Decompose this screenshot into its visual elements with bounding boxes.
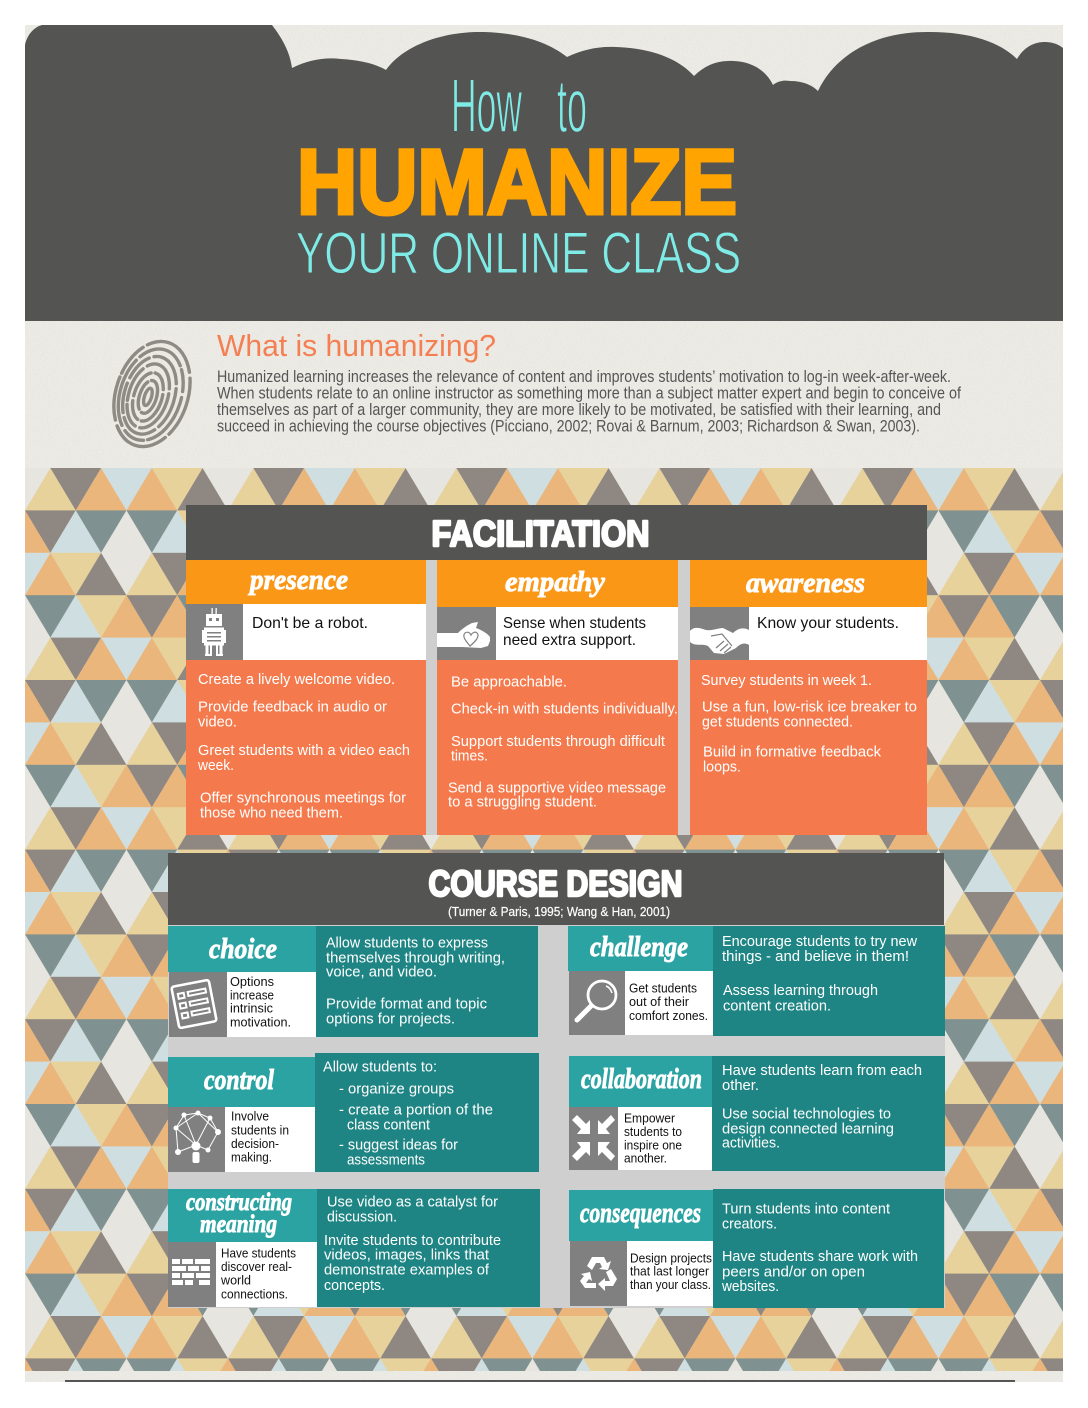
tips: empathy: times. [451,748,488,765]
card: empathy [437,560,678,835]
tips: consequences: creators. [722,1215,777,1232]
icon: arrows pointing inward [572,1115,615,1161]
tagline: collaboration [624,1110,682,1166]
tips: awareness: loops. [703,759,741,776]
tips: empathy: Be approachable. [451,674,567,691]
tips: challenge: content creation. [723,998,831,1015]
tips: presence: Provide feedback in audio or [198,699,387,716]
panel: facilitation [186,505,927,835]
section: what is humanizing [217,328,961,436]
tips: constructing meaning: demonstrate examples of [324,1261,490,1278]
tagline: collaboration: inspire one [624,1137,682,1152]
title line: YOUR ONLINE CLASS: YOUR ONLINE CLASS [296,221,741,286]
tips: choice: themselves through writing, [326,949,505,966]
tips: constructing meaning [324,1194,501,1294]
tagline: challenge: comfort zones. [629,1008,708,1023]
tagline: control: Involve [231,1109,269,1124]
tips: awareness [701,672,917,776]
card title: choice: choice [209,933,277,965]
tagline: constructing meaning: world [220,1272,251,1287]
tagline: control [231,1109,289,1165]
tips: control: class content [347,1116,431,1133]
card title: consequences: consequences [580,1197,701,1229]
tips: collaboration: design connected learning [722,1120,894,1137]
tips: consequences: peers and/or on open [722,1264,865,1281]
icon: robot [202,608,226,656]
icon: brick wall [172,1259,210,1285]
tips: empathy: Support students through difficult [451,733,666,750]
tips: empathy: Send a supportive video message [448,779,666,796]
tips: choice: Allow students to express [326,934,488,951]
tips: control: - suggest ideas for [339,1136,458,1153]
title line: HUMANIZE: HUMANIZE [297,132,737,234]
icon: handshake [690,628,749,654]
card title: constructing meaning: meaning [200,1211,277,1238]
course design header bar [168,853,944,925]
tips: collaboration: other. [722,1077,759,1094]
tips: control: - organize groups [339,1080,454,1097]
tips: control: - create a portion of the [339,1101,493,1118]
tips: constructing meaning: Invite students to contribute [324,1232,501,1249]
tips: constructing meaning: videos, images, links that [324,1246,490,1263]
tips: consequences [721,1200,918,1295]
tips: awareness: Build in formative feedback [703,744,881,761]
card title: constructing meaning: constructing [186,1189,292,1216]
tips: challenge: Encourage students to try new [722,933,917,950]
tips: awareness: Survey students in week 1. [701,672,872,689]
card title: awareness: awareness [746,567,865,599]
paragraph: definition [217,368,961,436]
tagline: constructing meaning: discover real- [221,1259,292,1274]
tagline: constructing meaning: Have students [221,1246,296,1261]
card: control [168,1053,539,1172]
tagline: consequences: than your class. [630,1277,711,1292]
tips: challenge: Assess learning through [723,982,878,999]
facilitation header bar [186,505,927,560]
tips: awareness: get students connected. [702,714,853,731]
card: consequences [569,1189,944,1308]
tips: constructing meaning: concepts. [324,1277,385,1294]
icon: recycle arrows [580,1257,617,1291]
tagline: collaboration: Empower [624,1110,676,1125]
card title: constructing meaning [186,1189,292,1238]
icon: form checklist [171,980,217,1028]
tips: presence [197,671,410,821]
tagline: constructing meaning [220,1246,296,1301]
card title: control: control [204,1064,275,1096]
heading: course design: COURSE DESIGN [428,863,682,904]
icon: magnifying glass [577,981,616,1020]
paragraph: definition: Humanized learning increases the relevance of content and improves students’ motivation to log-in week-after-week. [217,368,951,386]
card: presence [186,560,426,835]
tagline: empathy: need extra support. [503,632,636,649]
tips: constructing meaning: discussion. [327,1209,397,1226]
card: choice [168,926,538,1037]
icon: network around person [174,1110,221,1163]
tips: challenge: things - and believe in them! [722,948,909,965]
card: challenge [568,926,945,1036]
card title: empathy: empathy [505,566,605,598]
title: to [557,64,587,149]
tagline: consequences: that last longer [630,1264,710,1279]
tagline: presence: Don't be a robot. [252,615,368,632]
card: constructing meaning [168,1189,540,1307]
tagline: collaboration: another. [624,1151,667,1166]
panel: course design [168,853,945,1308]
icon: fingerprint [101,332,203,456]
tagline: challenge: out of their [629,994,690,1009]
tips: collaboration: Use social technologies to [722,1105,891,1122]
tagline: awareness: Know your students. [757,615,899,632]
tagline: challenge: Get students [629,981,697,996]
tips: presence: Create a lively welcome video. [198,671,395,688]
card title: presence: presence [247,564,348,596]
tips: control: assessments [347,1151,425,1168]
tagline: consequences: Design projects [630,1250,712,1265]
tagline: control: students in [231,1122,289,1137]
header: dark cloud banner [25,25,1063,321]
icon: hand holding heart [437,622,490,648]
bottom rule [65,1380,1015,1382]
tagline: consequences [630,1250,712,1292]
tagline: choice: intrinsic [230,1001,273,1016]
tagline: challenge [629,981,708,1023]
tagline: control: making. [231,1150,272,1165]
tagline: collaboration: students to [624,1124,682,1139]
citation: (Turner & Paris, 1995; Wang & Han, 2001) [448,905,670,919]
triangle pattern background [25,468,1063,1371]
heading: facilitation: FACILITATION [432,513,650,554]
tips: presence: video. [198,714,237,731]
tips: presence: Offer synchronous meetings for [200,790,406,807]
card title: collaboration: collaboration [581,1063,702,1095]
tagline: choice: motivation. [230,1015,291,1030]
tips: collaboration: Have students learn from each [722,1062,922,1079]
tips: choice: voice, and video. [326,964,437,981]
tips: consequences: Turn students into content [722,1200,891,1217]
tips: choice [326,934,505,1027]
tagline: choice [230,974,291,1030]
tips: presence: week. [197,757,234,774]
tips: control: Allow students to: [323,1059,437,1076]
paragraph: definition: themselves as part of a larger community, they are more likely to be motivated, be satisfied with their learning, and [217,401,941,419]
tips: empathy [448,674,678,811]
tips: choice: Provide format and topic [326,995,487,1012]
card: collaboration [569,1056,945,1171]
tips: consequences: websites. [721,1278,779,1295]
tips: presence: Greet students with a video each [198,742,410,759]
tips: control [323,1059,493,1168]
tips: awareness: Use a fun, low-risk ice breaker to [702,699,917,716]
tagline: empathy [503,615,646,649]
card title: challenge: challenge [590,931,688,963]
tips: empathy: Check-in with students individually. [451,700,678,717]
paragraph: definition: succeed in achieving the course objectives (Picciano, 2002; Rovai & Barnum, 2003; Richardson & Swan, 2003). [217,418,920,436]
tips: empathy: to a struggling student. [448,794,597,811]
tips: collaboration: activities. [722,1135,780,1152]
tagline: control: decision- [231,1136,279,1151]
paragraph: definition: When students relate to an online instructor as something more than a subject matter expert and begin to conceive of [217,384,961,402]
tips: collaboration [722,1062,922,1152]
card: awareness [690,560,927,835]
tagline: choice: Options [230,974,274,989]
tagline: empathy: Sense when students [503,615,646,632]
tips: choice: options for projects. [326,1010,455,1027]
tips: presence: those who need them. [200,804,343,821]
title line: How to: How [451,64,523,149]
tagline: constructing meaning: connections. [221,1286,288,1301]
title [296,64,741,286]
heading: what is humanizing: What is humanizing? [217,328,496,363]
tips: constructing meaning: Use video as a catalyst for [327,1194,498,1211]
tips: consequences: Have students share work with [722,1248,918,1265]
tagline: choice: increase [230,987,274,1002]
tips: challenge [722,933,917,1015]
